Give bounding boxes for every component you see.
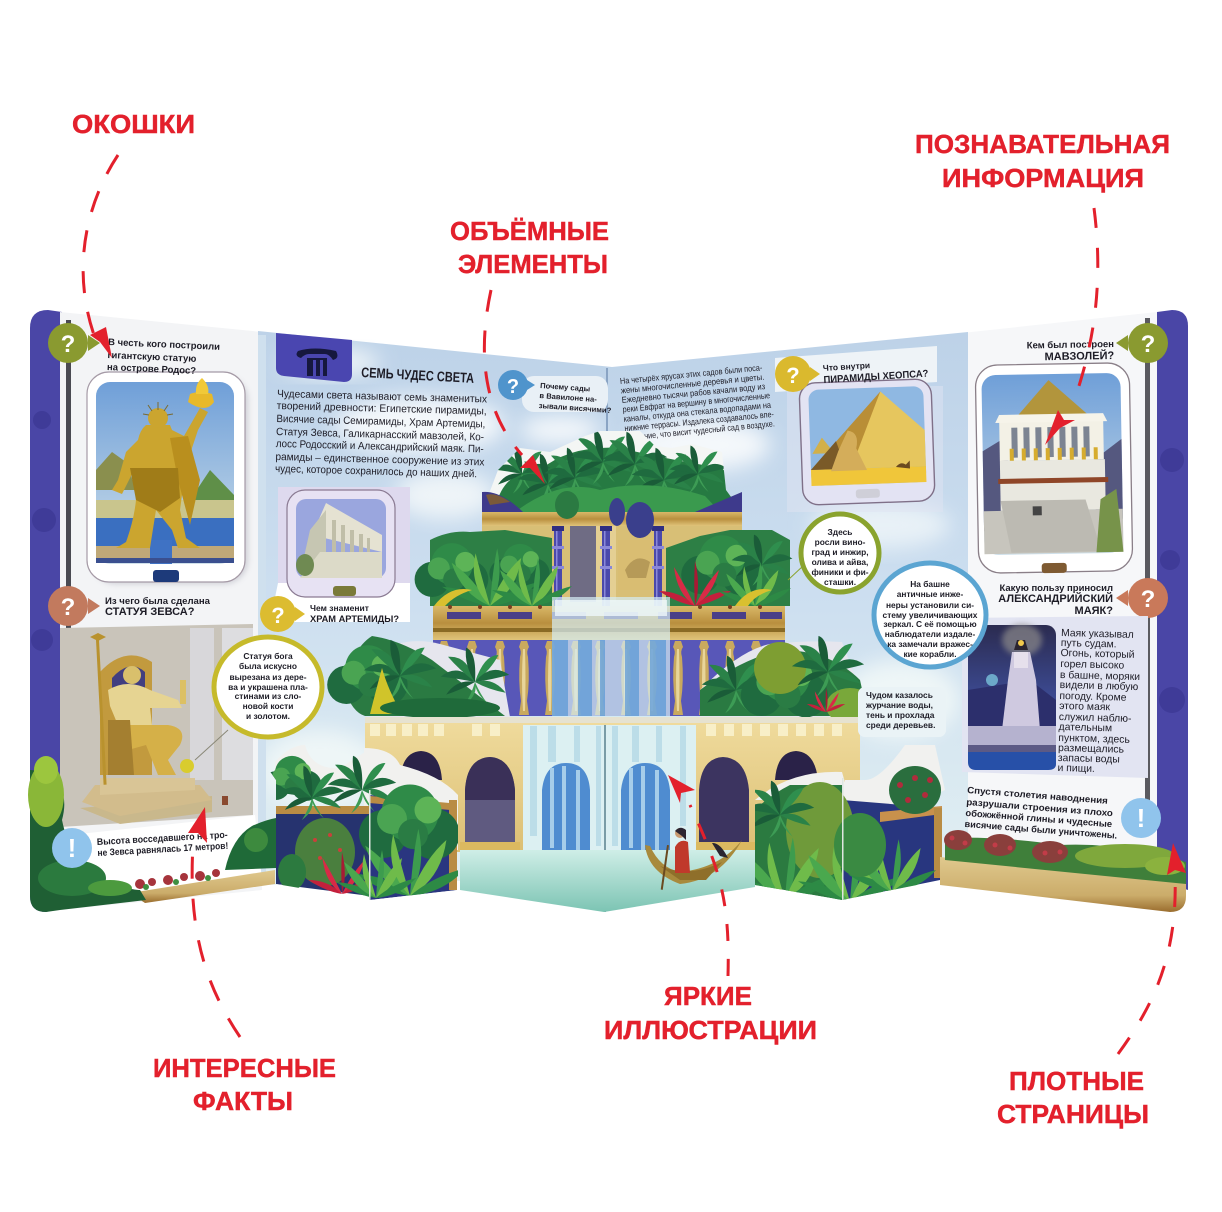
panel: right purple strip	[1157, 310, 1188, 890]
text block: seven wonders intro: Чудесами света называют семь знаменитых	[277, 388, 488, 406]
text block: gardens description: каналы, откуда она стекала водопадами на	[623, 400, 772, 424]
callout: lighthouse mirrors: зеркал. С её помощью	[883, 619, 977, 629]
text block: seven wonders intro: рамиды – единственное сооружение из этих	[275, 451, 485, 468]
question: Colossus	[48, 323, 220, 378]
label: cognitive info: ПОЗНАВАТЕЛЬНАЯ	[915, 129, 1170, 159]
text block: gardens description: Ежедневно тысячи рабов качали воду из	[621, 381, 766, 405]
fact: throne height: Высота восседавшего на тро-	[96, 829, 228, 847]
text: lighthouse description: горел высоко	[1060, 659, 1125, 672]
callout: plants: сташки.	[824, 577, 856, 587]
text block: gardens description: реки Евфрат на вершину в многочисленные	[622, 390, 771, 414]
question: Temple of Artemis: ?	[271, 603, 285, 628]
text: lighthouse description: дательным	[1058, 722, 1112, 734]
note: pleasant garden: журчание воды,	[865, 700, 933, 710]
text block: gardens description: На четырёх ярусах этих садов были поса-	[619, 362, 763, 386]
callout: lighthouse mirrors: кие корабли.	[903, 649, 957, 659]
question: mausoleum: ?	[1141, 331, 1155, 358]
question: pyramid: Что внутри	[823, 360, 870, 373]
left page foliage and ledge	[28, 756, 276, 912]
popup: upper waterfall	[552, 597, 670, 717]
title block: СЕМЬ ЧУДЕС СВЕТА	[361, 364, 475, 386]
text: lighthouse description: путь судам.	[1061, 638, 1117, 650]
callout: statue of wood: Статуя бога	[243, 651, 293, 661]
callout: plants	[788, 514, 879, 592]
question: Zeus: ?	[61, 594, 75, 621]
text: lighthouse description: запасы воды	[1058, 753, 1120, 766]
callout: lighthouse mirrors: неры установили си-	[886, 600, 974, 610]
question: Temple of Artemis	[260, 596, 399, 632]
fact: throne height	[52, 828, 229, 868]
label: cognitive info: ИНФОРМАЦИЯ	[942, 163, 1144, 193]
foliage: lower right tier	[700, 636, 874, 724]
callout: statue of wood: новой кости	[243, 701, 293, 711]
book spread	[30, 310, 1188, 912]
callout: lighthouse mirrors: стему увеличивающих	[883, 610, 978, 620]
foliage: lower left tier	[327, 636, 510, 718]
question: Temple of Artemis: ХРАМ АРТЕМИДЫ?	[310, 614, 399, 625]
label: 3D elements: ОБЪЁМНЫЕ	[450, 216, 609, 246]
text: lighthouse description: этого маяк	[1059, 701, 1111, 713]
text block: gardens description: чатление, что висит чудесный сад в воздухе.	[625, 418, 775, 443]
text: lighthouse description: Огонь, который	[1060, 648, 1135, 661]
question: Colossus: В честь кого построили	[108, 337, 220, 353]
statue	[112, 378, 214, 548]
card: Pyramid of Cheops window	[775, 346, 943, 512]
popup: lower wall	[365, 717, 860, 852]
popup: left side card	[270, 748, 458, 900]
callout: lighthouse mirrors: ка замечали вражес-	[887, 639, 973, 649]
popup: main waterfall	[523, 725, 696, 912]
text block: seven wonders intro: творений древности: Египетские пирамиды,	[277, 400, 487, 417]
label: bright illustrations: ЯРКИЕ	[664, 981, 752, 1011]
text: lighthouse description: размещались	[1058, 743, 1124, 756]
popup: hanging gardens	[261, 430, 945, 912]
card: Colossus of Rhodes window	[87, 372, 248, 584]
callout: plants: финики и фи-	[811, 567, 869, 577]
text block: destruction note	[964, 785, 1161, 841]
question: mausoleum: МАВЗОЛЕЙ?	[1044, 349, 1115, 363]
question: mausoleum: Кем был построен	[1027, 339, 1114, 352]
text: lighthouse description: и пищи.	[1057, 763, 1095, 775]
popup: middle tier wall	[415, 491, 792, 609]
question: Colossus: ?	[61, 331, 75, 358]
label: bright illustrations: ИЛЛЮСТРАЦИИ	[604, 1015, 817, 1045]
label: bright illustrations	[604, 775, 817, 1045]
popup: balustrade columns	[433, 640, 785, 716]
arrow: interesting facts	[188, 807, 240, 1037]
panel: right white page	[945, 312, 1157, 885]
text: lighthouse description: служил наблю-	[1059, 711, 1132, 725]
callout: plants: град и инжир,	[811, 547, 869, 557]
text: lighthouse description: Маяк указывал	[1061, 628, 1134, 641]
foliage: middle right	[659, 530, 792, 606]
callout: lighthouse mirrors: наблюдатели издале-	[885, 629, 975, 639]
text block: gardens description: нижние террасы. Издалека создавалось впе-	[624, 409, 774, 433]
question: lighthouse: Какую пользу приносил	[999, 583, 1113, 594]
callout: plants: олива и айва,	[812, 557, 868, 567]
question: Zeus: СТАТУЯ ЗЕВСА?	[105, 606, 195, 618]
question: why hanging gardens: ?	[507, 376, 519, 398]
text block: destruction note: обожжённой глины и чудесные	[965, 808, 1112, 829]
label: cognitive info	[915, 129, 1170, 445]
text block: destruction note: Спустя столетия наводнения	[967, 785, 1108, 806]
card: Mausoleum window	[975, 363, 1133, 574]
text block: seven wonders intro: чудес, которое сохранилось до наших дней.	[275, 463, 477, 480]
arrow: bright illustrations	[668, 775, 728, 976]
callout: statue of wood: ва и украшена пла-	[228, 682, 308, 692]
note: pleasant garden: среди деревьев.	[866, 720, 935, 730]
callout: statue of wood: стинами из сло-	[235, 691, 302, 701]
popup: right side card	[755, 745, 945, 900]
question: mausoleum	[1027, 323, 1168, 364]
icon: ionic column tab	[276, 333, 352, 382]
question: Zeus: Из чего была сделана	[105, 596, 211, 607]
label: 3D elements: ЭЛЕМЕНТЫ	[458, 249, 608, 279]
text block: gardens description	[619, 362, 775, 443]
arrow: 3D elements	[484, 290, 545, 484]
question: pyramid: ?	[786, 363, 800, 388]
text: lighthouse description: пунктом, здесь	[1058, 733, 1130, 746]
callout: plants: росли вино-	[815, 537, 866, 547]
card: Temple of Artemis window	[270, 487, 410, 622]
question: why hanging gardens	[498, 370, 613, 415]
foliage: middle left	[415, 530, 572, 606]
text: lighthouse description: в башне, моряки	[1060, 669, 1140, 683]
question: Colossus: на острове Родос?	[107, 362, 196, 377]
question: why hanging gardens: Почему сады	[540, 381, 591, 393]
callout: plants: Здесь	[828, 527, 852, 537]
text block: seven wonders intro: лосс Родосский и Александрийский маяк. Пи-	[276, 438, 484, 455]
panel: left white page	[60, 312, 262, 910]
label: windows: ОКОШКИ	[72, 109, 195, 139]
right page foliage and ledge	[940, 830, 1186, 912]
panel: central sky	[258, 331, 968, 885]
question: lighthouse: МАЯК?	[1075, 605, 1113, 617]
label: interesting facts: ФАКТЫ	[193, 1086, 293, 1116]
text block: seven wonders intro: Статуя Зевса, Галикарнасский мавзолей, Ко-	[276, 426, 485, 443]
arrow: thick pages	[1118, 843, 1186, 1054]
illustration: boatman	[645, 828, 742, 890]
label: 3D elements	[450, 216, 609, 484]
callout: lighthouse mirrors: На башне	[910, 579, 950, 589]
question: pyramid: ПИРАМИДЫ ХЕОПСА?	[823, 369, 929, 386]
question: Colossus: гигантскую статую	[107, 350, 197, 365]
callout: statue of wood: и золотом.	[246, 711, 290, 721]
callout: statue of wood: вырезана из дере-	[229, 672, 307, 682]
question: Zeus	[48, 586, 211, 626]
label: thick pages	[997, 843, 1186, 1129]
question: lighthouse: АЛЕКСАНДРИЙСКИЙ	[998, 592, 1113, 605]
question: lighthouse: ?	[1141, 586, 1155, 613]
text block: seven wonders intro: Висячие сады Семирамиды, Храм Артемиды,	[276, 413, 486, 430]
text block: seven wonders intro	[275, 388, 488, 480]
text: lighthouse description: погоду. Кроме	[1059, 691, 1127, 704]
panel: lighthouse info	[962, 616, 1148, 778]
note: pleasant garden: Чудом казалось	[866, 690, 933, 700]
question: lighthouse	[998, 578, 1168, 618]
note: pleasant garden	[858, 687, 946, 737]
callout: statue of wood	[214, 637, 322, 737]
text block: destruction note: разрушали строения из плохо	[966, 797, 1114, 818]
callout: statue of wood: была искусно	[239, 661, 297, 671]
title block	[276, 333, 475, 386]
popup: water pool	[460, 850, 755, 912]
text block: destruction note: висячие сады были уничтожены.	[964, 819, 1118, 841]
text block: gardens description: жены многочисленные деревья и цветы.	[620, 372, 765, 395]
fact: throne height: !	[68, 833, 76, 863]
fact: throne height: не Зевса равнялась 17 метров!	[97, 840, 229, 858]
panel: Zeus statue	[60, 624, 253, 827]
text: lighthouse description	[1057, 628, 1141, 776]
text: lighthouse description: видели в любую	[1060, 679, 1139, 693]
question: why hanging gardens: в Вавилоне на-	[539, 391, 598, 404]
label: thick pages: СТРАНИЦЫ	[997, 1099, 1149, 1129]
question: why hanging gardens: зывали висячими?	[538, 401, 612, 415]
question: pyramid	[775, 356, 929, 392]
popup: top tier	[482, 430, 742, 512]
arrow: windows	[83, 155, 118, 358]
label: thick pages: ПЛОТНЫЕ	[1009, 1066, 1144, 1096]
panel: left purple strip	[30, 310, 62, 912]
popup: golden band	[433, 605, 785, 640]
text block: destruction note: !	[1137, 803, 1145, 833]
label: interesting facts: ИНТЕРЕСНЫЕ	[153, 1053, 336, 1083]
arrow: cognitive info	[1045, 208, 1098, 445]
note: pleasant garden: тень и прохлада	[866, 710, 935, 720]
vines	[555, 491, 654, 538]
question: Temple of Artemis: Чем знаменит	[310, 603, 369, 613]
callout: lighthouse mirrors: античные инже-	[897, 589, 963, 599]
label: windows	[72, 109, 195, 358]
callout: lighthouse mirrors	[874, 563, 986, 667]
label: interesting facts	[153, 807, 336, 1116]
